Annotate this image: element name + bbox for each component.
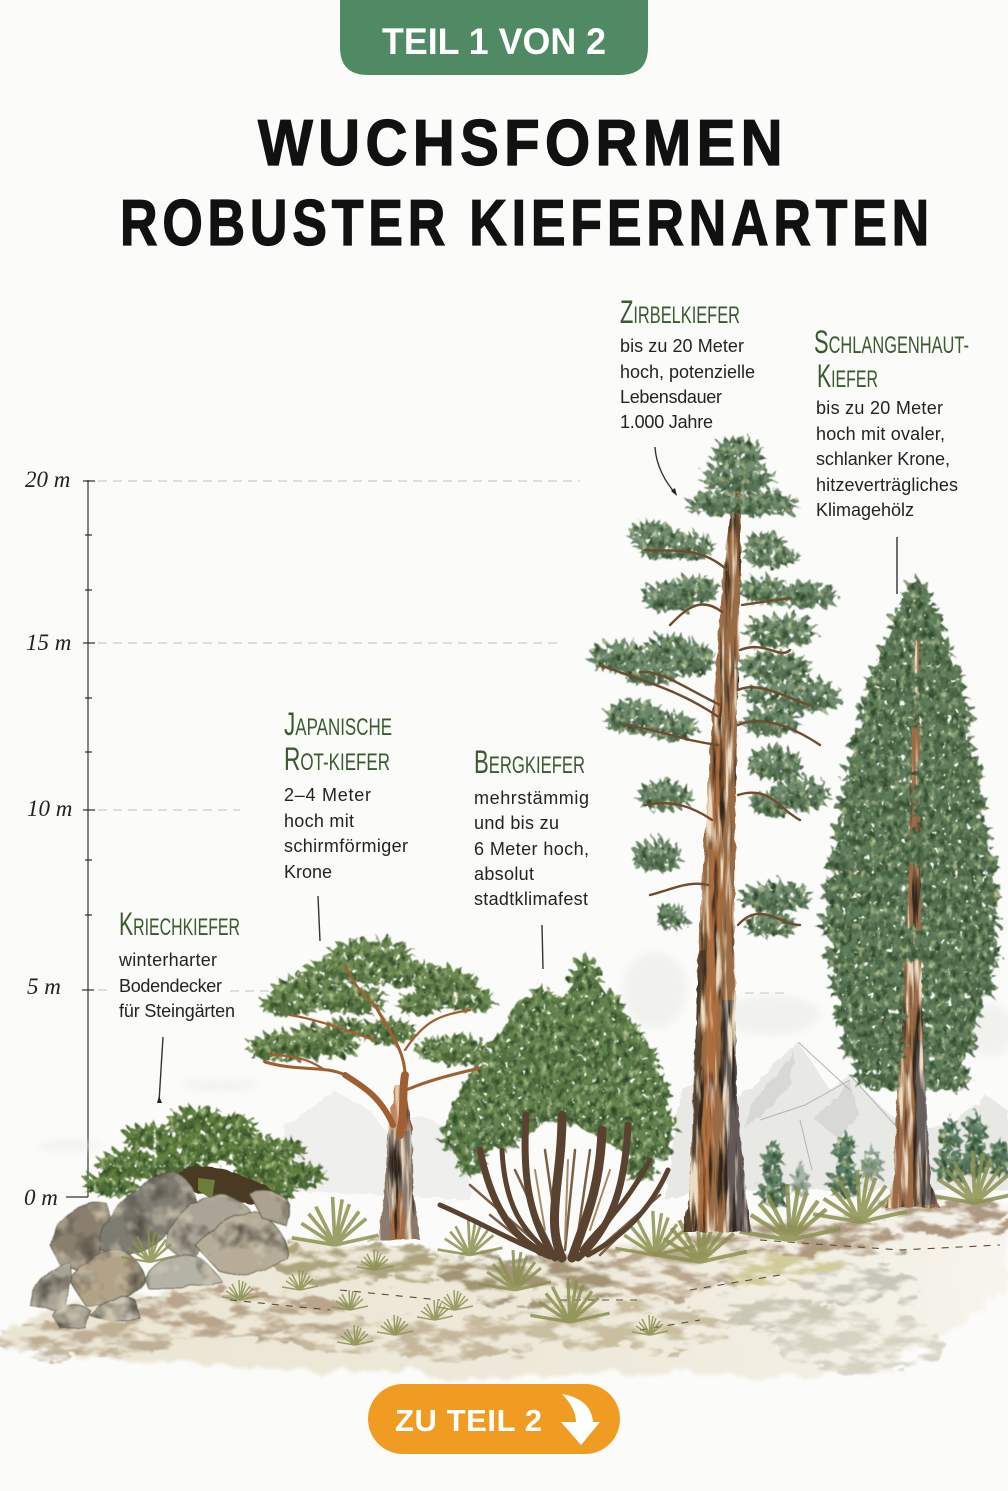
label: Bergkiefer: mehrstämmig (474, 788, 589, 808)
foliage (437, 951, 681, 1185)
crown mass (830, 580, 990, 1090)
label: Kriechkiefer: für Steingärten (119, 1001, 235, 1021)
label: Japanische Rot-Kiefer: schirmförmiger (284, 836, 408, 856)
label: Zirbelkiefer: ZIRBELKIEFER (620, 294, 740, 330)
label: Schlangenhaut-Kiefer: hitzeverträgliches (816, 475, 958, 495)
trunk (683, 490, 752, 1232)
label: Japanische Rot-Kiefer: hoch mit (284, 811, 354, 831)
label: Zirbelkiefer: 1.000 Jahre (620, 412, 713, 432)
label: Schlangenhaut-Kiefer (814, 324, 969, 520)
height scale axis: 10 m (27, 796, 72, 821)
tree: Zirbelkiefer (586, 433, 844, 1232)
tree: Japanische Rot-Kiefer (244, 935, 498, 1240)
label: Schlangenhaut-Kiefer: schlanker Krone, (816, 449, 950, 469)
label: Japanische Rot-Kiefer: 2–4 Meter (284, 785, 371, 805)
height scale axis (24, 467, 790, 1210)
label: Kriechkiefer: Bodendecker (119, 976, 222, 996)
label: Bergkiefer: und bis zu (474, 813, 559, 833)
soil blotches (0, 1197, 1008, 1373)
multi-stem trunks (440, 1115, 668, 1258)
label: Japanische Rot-Kiefer: Krone (284, 862, 332, 882)
title (120, 106, 934, 259)
height scale axis: 5 m (27, 974, 61, 999)
label: Zirbelkiefer (620, 294, 755, 432)
label: Schlangenhaut-Kiefer: bis zu 20 Meter (816, 398, 943, 418)
button: next part: ZU TEIL 2 (395, 1403, 542, 1438)
trunk (378, 1085, 420, 1240)
label: Schlangenhaut-Kiefer: Klimagehölz (816, 500, 914, 520)
distant mountains and clouds (38, 952, 1008, 1200)
label: Zirbelkiefer: bis zu 20 Meter (620, 336, 744, 356)
foliage (816, 574, 1004, 1094)
title: WUCHSFORMEN (258, 106, 788, 179)
height scale axis: 15 m (26, 630, 71, 655)
foliage (244, 935, 498, 1068)
button: next part (368, 1384, 620, 1454)
callout arrows (157, 447, 897, 1103)
foliage (586, 433, 844, 939)
top tab: part label (340, 0, 648, 75)
label: Bergkiefer: BERGKIEFER (474, 744, 585, 780)
label: Kriechkiefer: KRIECHKIEFER (119, 906, 240, 942)
rocks and Kriechkiefer (30, 1104, 329, 1328)
label: Zirbelkiefer: Lebensdauer (620, 387, 722, 407)
label: Schlangenhaut-Kiefer: KIEFER (817, 358, 878, 394)
stones (30, 1170, 290, 1328)
tree: Bergkiefer (437, 951, 681, 1258)
label: Bergkiefer: absolut (474, 864, 534, 884)
label: Bergkiefer: stadtklimafest (474, 889, 588, 909)
label: Zirbelkiefer: hoch, potenzielle (620, 362, 755, 382)
small background conifers (754, 1108, 1008, 1210)
branches (600, 550, 820, 925)
grass on stones (121, 1230, 179, 1262)
label: Kriechkiefer: winterharter (118, 950, 217, 970)
label: Japanische Rot-Kiefer: JAPANISCHE (284, 706, 392, 742)
label: Japanische Rot-Kiefer: ROT-KIEFER (284, 741, 390, 777)
height scale axis: 0 m (24, 1185, 58, 1210)
label: Japanische Rot-Kiefer (284, 706, 408, 882)
dark hollow under branches (178, 1166, 285, 1205)
ground (0, 1151, 1008, 1380)
label: Bergkiefer (474, 744, 589, 909)
crown mass (442, 960, 672, 1165)
prostrate foliage (81, 1104, 329, 1204)
top tab: part label: TEIL 1 VON 2 (382, 21, 606, 62)
trunk (885, 640, 940, 1208)
tree: Schlangenhaut-Kiefer (816, 574, 1004, 1208)
label: Schlangenhaut-Kiefer: hoch mit ovaler, (816, 424, 945, 444)
branches (265, 965, 480, 1135)
height scale axis: 20 m (25, 467, 70, 492)
label: Kriechkiefer (118, 906, 240, 1021)
icon: curved down arrow (561, 1394, 600, 1445)
label: Bergkiefer: 6 Meter hoch, (474, 839, 589, 859)
grass clumps (292, 1151, 1008, 1322)
